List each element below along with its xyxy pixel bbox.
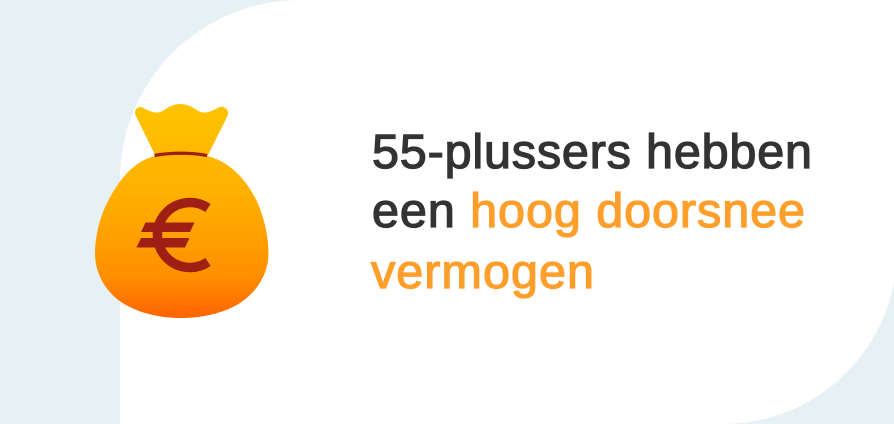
- heading line 3: vermogen: [371, 245, 594, 299]
- bag neck: [135, 104, 228, 157]
- bag tie band: [154, 153, 207, 156]
- euro symbol: [136, 202, 208, 268]
- icon: money bag with euro sign: [95, 104, 268, 318]
- bag body: [95, 154, 268, 318]
- heading line 2: een hoog doorsnee: [372, 184, 805, 238]
- heading text: [371, 125, 812, 299]
- heading line 1: 55-plussers hebben: [372, 125, 812, 179]
